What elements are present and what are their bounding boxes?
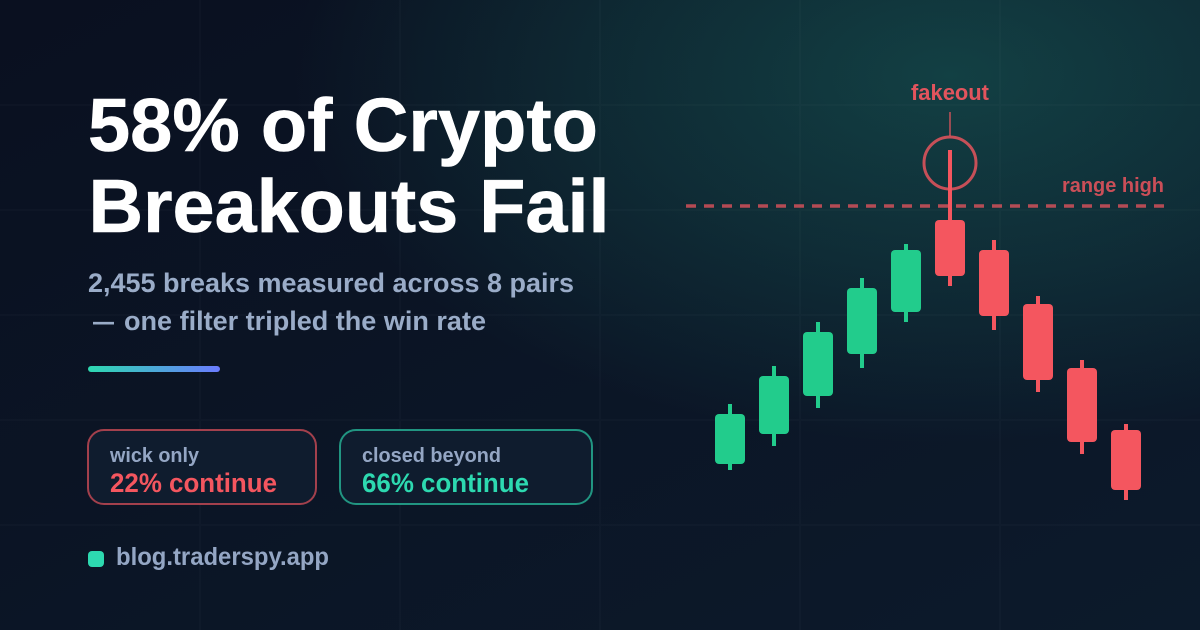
- card: closed beyond: 66% continue: [362, 468, 529, 498]
- fakeout stem: [949, 112, 951, 136]
- red candle 9: [1067, 360, 1097, 454]
- green candle 1: [715, 404, 745, 470]
- footer: site: blog.traderspy.app: [116, 543, 329, 571]
- fakeout circle: [924, 137, 976, 189]
- title: [88, 83, 610, 248]
- label: fakeout: fakeout: [911, 80, 990, 105]
- accent bar: [88, 366, 220, 372]
- green candle 3: [803, 322, 833, 408]
- card: wick only: [88, 430, 316, 504]
- title: 58% of Crypto: [88, 83, 598, 167]
- subtitle: —: [93, 306, 114, 336]
- red candle 10: [1111, 424, 1141, 500]
- label: range high: range high: [1062, 175, 1164, 197]
- title: Breakouts Fail: [88, 164, 610, 248]
- candlestick chart: [715, 150, 1141, 500]
- subtitle: 2,455 breaks measured across 8 pairs: [88, 268, 574, 298]
- green candle 5: [891, 244, 921, 322]
- red candle 7: [979, 240, 1009, 330]
- red candle 6: fakeout: [935, 150, 965, 286]
- subtitle: [88, 268, 574, 336]
- red candle 8: [1023, 296, 1053, 392]
- range high line: [686, 204, 1164, 208]
- card: closed beyond: [340, 430, 592, 504]
- subtitle: one filter tripled the win rate: [124, 306, 486, 336]
- green candle 2: [759, 366, 789, 446]
- card: closed beyond: closed beyond: [362, 445, 501, 467]
- card: wick only: wick only: [109, 445, 200, 467]
- green candle 4: [847, 278, 877, 368]
- card: wick only: 22% continue: [110, 468, 277, 498]
